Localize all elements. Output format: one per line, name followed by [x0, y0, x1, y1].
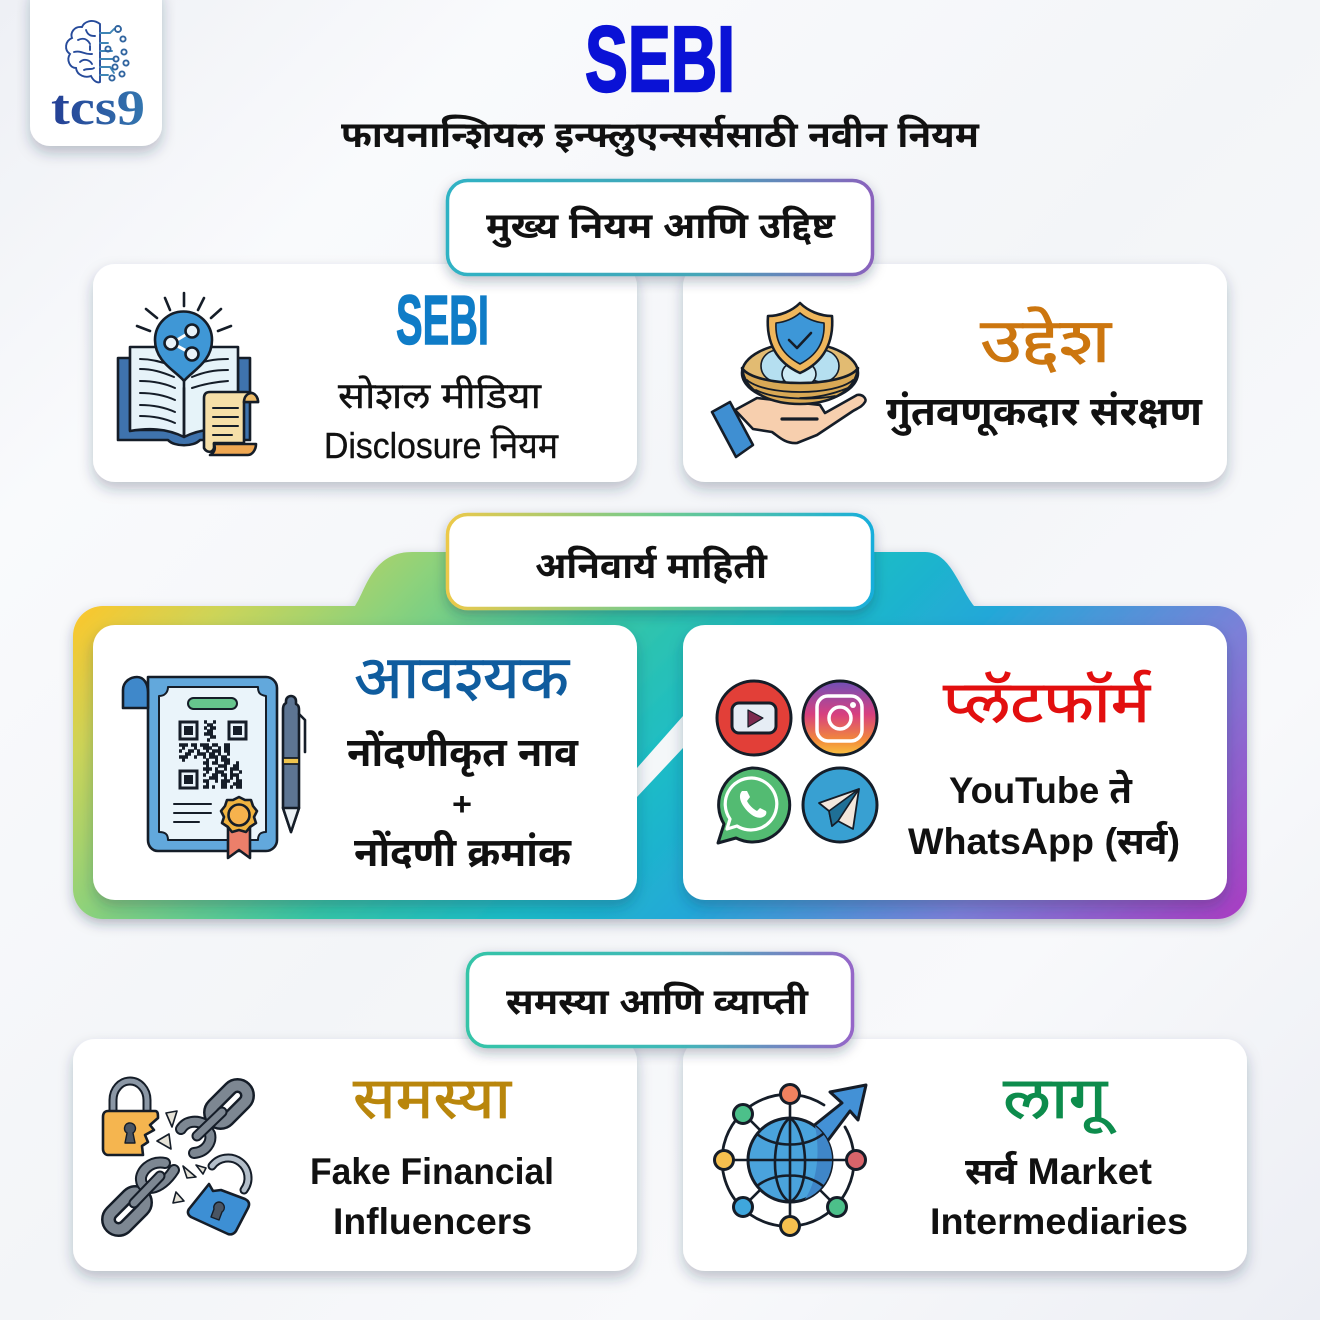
icon: globe network with growth arrow	[714, 1084, 866, 1236]
panel: applicable	[683, 1039, 1247, 1271]
subtitle: फायनान्शियल इन्फ्लुएन्सर्ससाठी नवीन नियम	[341, 114, 980, 157]
icon: WhatsApp	[718, 768, 790, 843]
pill heading: mandatory information: अनिवार्य माहिती	[535, 545, 768, 586]
heading: applicable: लागू	[1003, 1066, 1116, 1135]
logo wordmark: tcs9	[51, 79, 145, 135]
pill heading: main rules and objective	[448, 180, 872, 274]
text: investor protection: गुंतवणूकदार संरक्षण	[886, 390, 1203, 436]
pill heading: problem and scope	[468, 954, 852, 1046]
text: all market: सर्व Market	[965, 1150, 1152, 1192]
pill heading: problem and scope: समस्या आणि व्याप्ती	[506, 981, 809, 1022]
heading: problem: समस्या	[353, 1066, 512, 1131]
text: registration number: नोंदणी क्रमांक	[354, 830, 572, 875]
text: social media: सोशल मीडिया	[338, 375, 542, 416]
white diagonal connector	[637, 716, 683, 797]
text: fake financial: Fake Financial	[310, 1151, 554, 1192]
icon: circuit brain	[66, 21, 129, 82]
pill heading: main rules and objective: मुख्य नियम आणि उद्दिष्ट	[486, 205, 836, 248]
panel: objective	[683, 264, 1227, 482]
panel: mandatory information band	[73, 552, 1247, 919]
panel: platforms	[683, 625, 1227, 900]
icon: social platforms	[717, 681, 877, 843]
icon: YouTube	[717, 681, 791, 755]
heading: required: आवश्यक	[354, 644, 570, 711]
icon: Instagram	[803, 681, 877, 755]
icon: broken chain and locks	[103, 1081, 252, 1234]
text: intermediaries: Intermediaries	[930, 1201, 1188, 1242]
panel: required details	[93, 625, 637, 900]
text: influencers: Influencers	[333, 1201, 532, 1242]
text: YouTube to: YouTube ते	[949, 769, 1133, 811]
heading: objective: उद्देश	[980, 306, 1113, 376]
icon: Telegram	[803, 768, 877, 842]
title: SEBI	[585, 7, 735, 111]
heading: platform: प्लॅटफॉर्म	[943, 670, 1151, 735]
text: disclosure rules: Disclosure नियम	[324, 425, 559, 466]
pill heading: mandatory information	[448, 514, 872, 608]
QR data modules	[179, 722, 242, 787]
text: registered name: नोंदणीकृत नाव	[347, 730, 579, 777]
logo card	[30, 0, 162, 146]
icon: hand holding nest with shield	[712, 303, 866, 457]
panel: SEBI disclosure rules	[93, 264, 637, 482]
text: plus: +	[452, 786, 472, 822]
text: WhatsApp all: WhatsApp (सर्व)	[908, 820, 1180, 862]
icon: certificate with QR code and pen	[123, 677, 305, 858]
icon: open book with share bubble and scroll	[118, 293, 258, 455]
panel: problem	[73, 1039, 637, 1271]
heading: SEBI: SEBI	[396, 281, 489, 359]
